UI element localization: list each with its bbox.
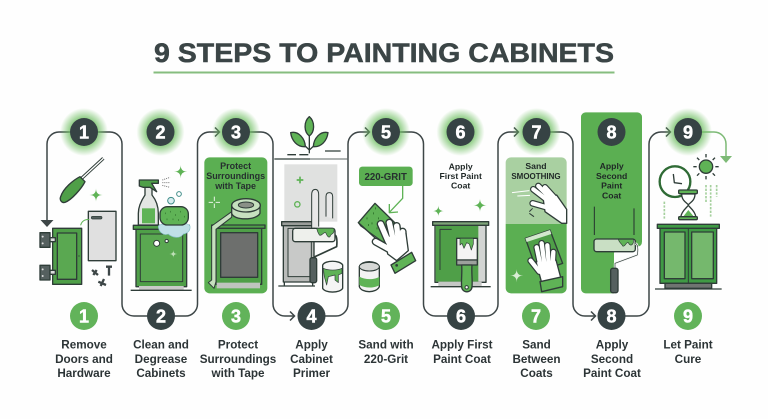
step 6 top badge [436, 108, 484, 156]
label: step 6: Apply First [431, 338, 493, 352]
label: step 7: Between [512, 353, 561, 366]
step 6 bottom badge [447, 302, 475, 330]
label: step 1 [55, 338, 113, 380]
step 7 top badge: 7 [531, 122, 542, 142]
icon: step 6 first coat cabinet and brush: First Paint [440, 171, 482, 181]
label: step 4: Primer [293, 367, 330, 380]
icon: step 4 plant, roller and paint can [274, 117, 348, 292]
icon: step 6 first coat cabinet and brush: Apply [449, 161, 473, 171]
label: step 1: Hardware [57, 367, 111, 380]
label: step 1: Remove [61, 338, 107, 352]
label: step 2: Clean and [133, 338, 189, 352]
step 1 top badge [60, 108, 108, 156]
label: step 2: Degrease [135, 353, 188, 366]
label: step 4 [290, 338, 333, 380]
step 7 top badge [512, 108, 560, 156]
label: step 1: Doors and [55, 353, 113, 366]
step 5 bottom badge [372, 302, 400, 330]
step 7 bottom badge: 7 [531, 306, 541, 326]
step 3 bottom badge: 3 [231, 306, 241, 326]
label: step 8: Paint Coat [583, 367, 641, 380]
step 3 bottom badge [222, 302, 250, 330]
panel: step 3 protect surroundings: with Tape [214, 181, 256, 191]
step 9 bottom badge: 9 [683, 306, 693, 326]
icon: step 1 tools and door [40, 158, 116, 286]
panel: step 8 second coat [581, 112, 642, 293]
step 5 bottom badge: 5 [381, 306, 391, 326]
step 4 bottom badge: 4 [306, 306, 317, 326]
label: step 9: Cure [675, 353, 702, 366]
step 2 top badge: 2 [155, 122, 166, 142]
label: step 5: 220-Grit [364, 353, 408, 366]
step 3 top badge [212, 108, 260, 156]
label: step 5: Sand with [358, 338, 414, 352]
step 6 bottom badge: 6 [456, 306, 466, 326]
step 9 top badge [664, 108, 712, 156]
panel: step 7 sand smoothing: SMOOTHING [511, 172, 561, 181]
panel: step 8 second coat: Coat [602, 191, 621, 201]
label: step 8: Apply [596, 338, 629, 352]
label: step 6 [431, 338, 493, 366]
step 2 top badge [136, 108, 184, 156]
panel: step 8 second coat: Apply [600, 161, 624, 171]
panel: step 3 protect surroundings [204, 157, 267, 293]
panel: step 7 sand smoothing: Sand [525, 161, 547, 171]
step 8 top badge [598, 118, 626, 146]
step 1 bottom badge [70, 302, 98, 330]
panel: step 3 protect surroundings: Protect [220, 161, 251, 171]
label: step 3 [200, 338, 277, 380]
icon: step 5 grit tag, sandpaper, hand and can: 220-GRIT [364, 172, 407, 183]
step 9 bottom badge [674, 302, 702, 330]
step 2 bottom badge [147, 302, 175, 330]
step 5 top badge: 5 [381, 122, 391, 142]
icon: step 2 spray bottle, sponge and cabinet [131, 165, 192, 290]
label: step 2 [133, 338, 189, 380]
label: step 7 [512, 338, 561, 380]
title: 9 STEPS TO PAINTING CABINETS [154, 38, 614, 68]
step 3 top badge: 3 [231, 122, 241, 142]
step 4 bottom badge [298, 302, 326, 330]
step 8 bottom badge: 8 [606, 306, 617, 326]
step 1 top badge: 1 [79, 122, 89, 142]
label: step 3: Protect [218, 338, 258, 352]
step 8 bottom badge [598, 302, 626, 330]
label: step 8: Second [591, 353, 633, 366]
step 1 bottom badge: 1 [79, 306, 89, 326]
label: step 3: with Tape [210, 367, 265, 380]
icon: step 9 clock, hourglass, sun and cabinet [655, 154, 722, 289]
label: step 3: Surroundings [200, 353, 277, 366]
panel: step 7 sand smoothing [506, 157, 567, 293]
icon: step 6 first coat cabinet and brush: Coat [451, 181, 470, 191]
panel: step 8 second coat: Paint [601, 181, 622, 191]
icon: step 6 first coat cabinet and brush [431, 161, 491, 292]
label: step 4: Cabinet [290, 353, 333, 366]
label: step 9 [663, 338, 713, 366]
label: step 8 [583, 338, 641, 380]
step 7 bottom badge [522, 302, 550, 330]
step 9 top badge: 9 [683, 122, 693, 142]
step 8 top badge: 8 [606, 122, 617, 142]
panel: step 8 second coat: Second [596, 171, 627, 181]
label: step 2: Cabinets [136, 367, 186, 380]
connector path [40, 128, 732, 320]
label: step 6: Paint Coat [433, 353, 491, 366]
step 5 top badge [362, 108, 410, 156]
label: step 5 [358, 338, 414, 366]
label: step 4: Apply [295, 338, 328, 352]
label: step 7: Sand [522, 338, 551, 352]
step 6 top badge: 6 [455, 122, 466, 142]
title underline [154, 72, 614, 74]
panel: step 3 protect surroundings: Surroundings [206, 171, 265, 181]
step 2 bottom badge: 2 [156, 306, 166, 326]
label: step 7: Coats [520, 367, 553, 380]
label: step 9: Let Paint [663, 338, 713, 352]
icon: step 5 grit tag, sandpaper, hand and can [358, 167, 416, 292]
